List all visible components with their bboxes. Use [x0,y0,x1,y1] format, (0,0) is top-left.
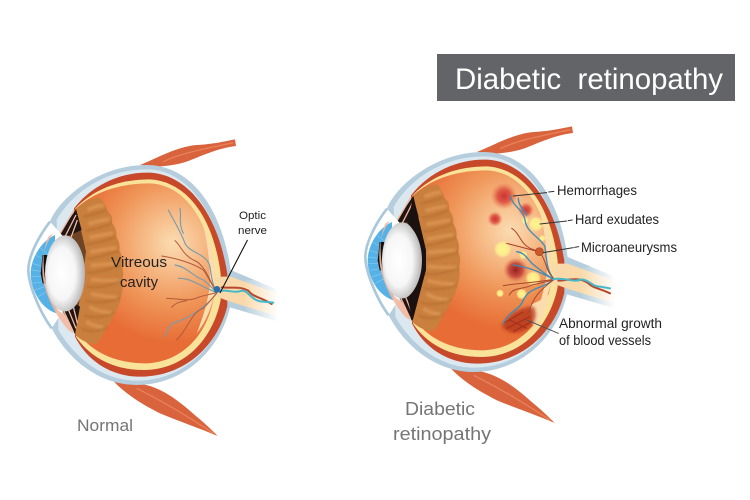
label: microaneurysms: Microaneurysms [581,240,677,255]
caption: diabetic retinopathy: Diabetic [405,399,475,419]
leader line: optic nerve [220,240,248,293]
caption: diabetic retinopathy [393,399,491,444]
black gap behind lens [407,196,426,321]
caption: normal: Normal [77,416,133,435]
caption: diabetic retinopathy: retinopathy [393,424,491,444]
leader lines [513,191,579,333]
title banner [437,54,735,101]
label: optic nerve: Optic [239,210,267,222]
label: optic nerve [238,210,267,237]
blood vessels [503,196,610,323]
eye anatomy: normal [28,139,280,436]
label: abnormal growth of blood vessels [559,316,662,348]
retinal lesions and vessels [407,183,610,333]
label: abnormal growth of blood vessels: of blood vessels [559,333,651,348]
label: hemorrhages: Hemorrhages [557,183,637,198]
hemorrhages [487,183,534,283]
retinal vessels: normal eye [162,208,273,340]
panel: normal eye [28,139,280,436]
label: vitreous cavity: cavity [120,274,158,291]
title banner: Diabetic retinopathy [455,63,723,96]
eye anatomy: diabetic [365,126,617,423]
microaneurysm [535,248,543,256]
label: abnormal growth of blood vessels: Abnormal growth [559,316,662,331]
panel: diabetic retinopathy eye [365,126,677,444]
label: vitreous cavity [111,254,167,291]
label: hard exudates: Hard exudates [575,212,659,227]
label: optic nerve: nerve [238,225,267,237]
abnormal vessel growth [502,307,536,333]
cream patch near growth [530,293,549,328]
hard exudates [494,216,546,300]
label: vitreous cavity: Vitreous [111,254,167,271]
